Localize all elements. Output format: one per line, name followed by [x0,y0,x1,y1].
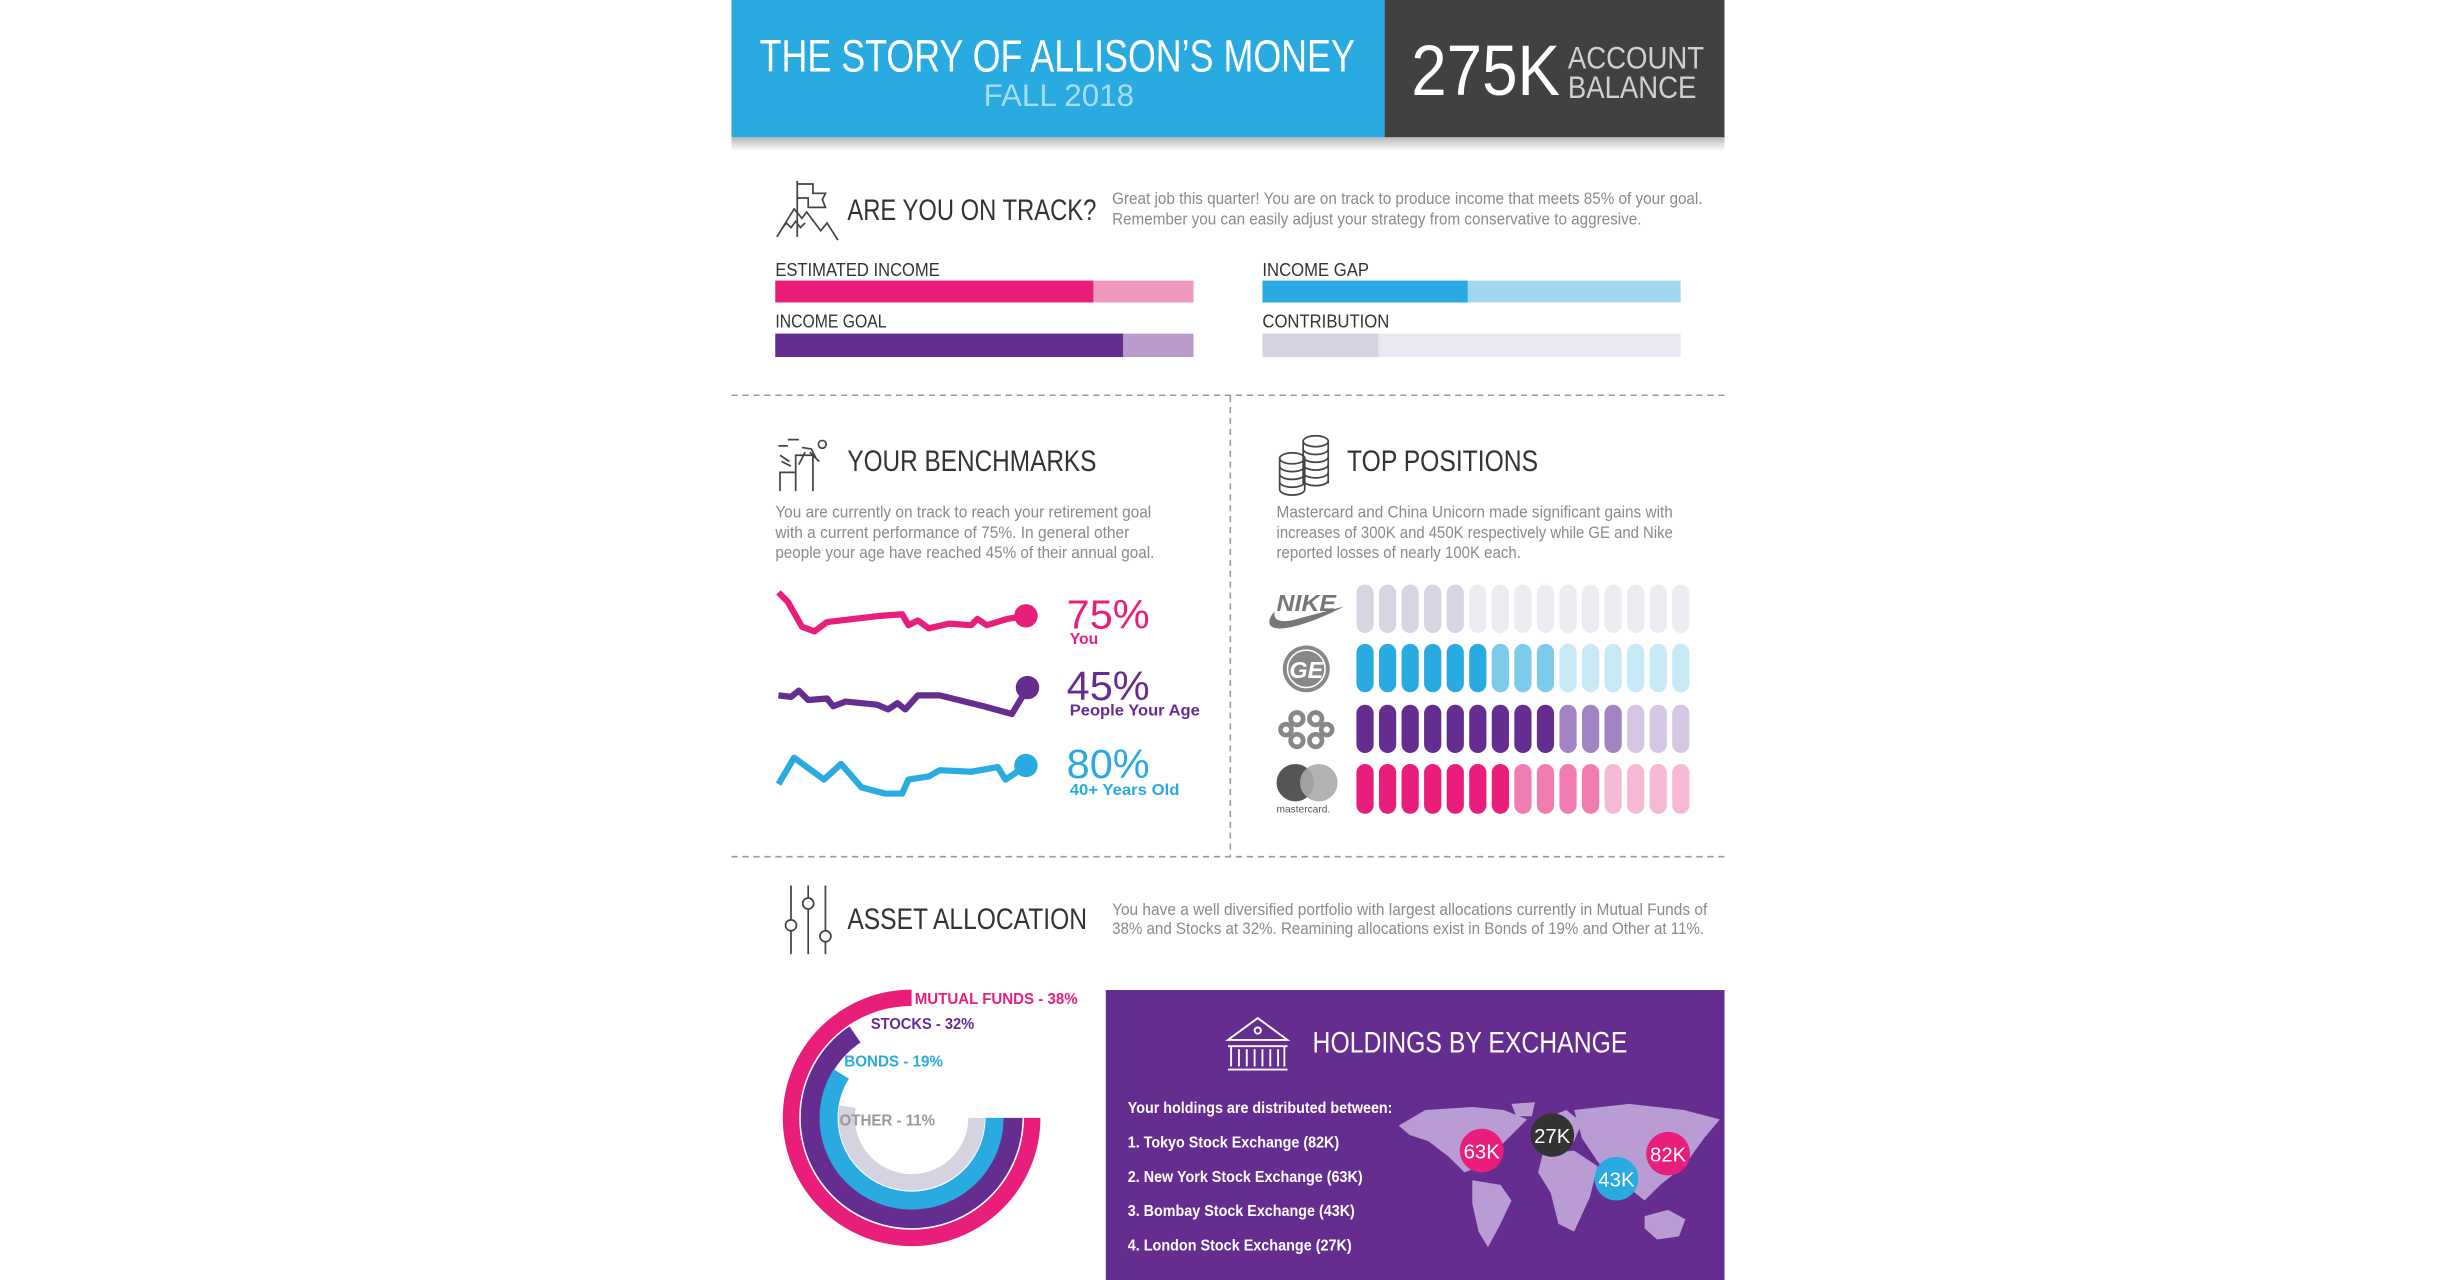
header [731,0,1725,151]
chart: people your age 45%: People Your Age [1070,703,1200,720]
text block: increases of 300K and 450K respectively while GE and Nike [1277,524,1673,542]
chart labels: OTHER - 11% [840,1113,935,1130]
chart: you 75%: You [1070,631,1098,648]
list: Your holdings are distributed between: [1128,1100,1392,1117]
section: are you on track [775,181,1703,357]
chart: you 75%: 75% [1067,591,1150,637]
map markers: 27K [1534,1126,1571,1148]
text block: You have a well diversified portfolio with largest allocations currently in Mutual Funds of [1112,901,1708,919]
panel: benchmarks [774,440,1200,799]
icon: coins [1280,436,1328,495]
text block [774,504,1154,562]
icon: bank [1228,1018,1288,1070]
list [1128,1100,1392,1254]
chart labels: BONDS - 19% [844,1053,943,1070]
heading: ARE YOU ON TRACK? [847,194,1096,227]
heading: HOLDINGS BY EXCHANGE [1313,1026,1627,1059]
text block [1112,190,1703,228]
bar: contribution [1262,310,1681,357]
text block: 38% and Stocks at 32%. Reamining allocations exist in Bonds of 19% and Other at 11%. [1112,920,1704,938]
account balance: BALANCE [1568,70,1696,105]
bar: contribution: CONTRIBUTION [1262,310,1389,331]
chart labels [840,991,1078,1130]
chart: 40+ years old 80%: 40+ Years Old [1070,782,1179,799]
icon: china unicom logo [1280,712,1332,747]
map markers: 63K [1464,1141,1500,1163]
chart: people your age 45% [778,663,1200,720]
account balance [1411,31,1704,111]
text block [1277,504,1673,562]
heading: YOUR BENCHMARKS [847,445,1096,478]
section: asset allocation [786,886,1708,1238]
chart: donut arcs [791,998,1032,1238]
text block: people your age have reached 45% of their annual goal. [775,544,1154,562]
panel: top positions [1269,436,1689,815]
icon: runner stairs [778,440,826,491]
panel: holdings by exchange [1106,990,1725,1280]
icon: mastercard logo [1277,764,1338,815]
list: 1. Tokyo Stock Exchange (82K) [1128,1135,1339,1151]
text block: with a current performance of 75%. In general other [774,524,1130,542]
world map [1399,1102,1720,1247]
text block: Remember you can easily adjust your strategy from conservative to aggresive. [1112,211,1641,228]
text block: Great job this quarter! You are on track to produce income that meets 85% of your goal. [1112,190,1703,208]
icon: mastercard logo: mastercard. [1277,804,1330,815]
icon: sliders [786,886,831,954]
text block: reported losses of nearly 100K each. [1277,544,1521,562]
text block: Mastercard and China Unicorn made significant gains with [1277,504,1673,522]
account balance: 275K [1411,31,1560,111]
list: 3. Bombay Stock Exchange (43K) [1128,1203,1355,1220]
text block: You are currently on track to reach your retirement goal [775,504,1151,522]
chart labels: STOCKS - 32% [871,1016,974,1033]
icon: nike logo [1269,590,1344,628]
chart: you 75% [778,591,1150,648]
map markers: 43K [1598,1169,1635,1191]
chart: 40+ years old 80% [778,741,1179,799]
bar: income gap [1262,259,1681,302]
icon: nike logo: NIKE [1277,590,1338,616]
text block [1112,901,1708,938]
heading: ASSET ALLOCATION [847,903,1087,936]
bar: income goal: INCOME GOAL [775,310,887,331]
heading: TOP POSITIONS [1347,445,1538,478]
bar: estimated income: ESTIMATED INCOME [775,259,940,280]
bar: income goal [775,310,1194,357]
title: THE STORY OF ALLISON’S MONEY [760,31,1355,82]
account balance: ACCOUNT [1568,41,1704,76]
chart labels: MUTUAL FUNDS - 38% [915,991,1078,1008]
bar: income gap: INCOME GAP [1262,259,1369,280]
subtitle: FALL 2018 [984,78,1134,113]
bar: estimated income [775,259,1194,302]
chart: 40+ years old 80%: 80% [1067,741,1150,787]
map markers: 82K [1650,1145,1687,1166]
list: 2. New York Stock Exchange (63K) [1128,1169,1363,1186]
list: 4. London Stock Exchange (27K) [1128,1237,1352,1254]
chart: people your age 45%: 45% [1067,663,1150,709]
map markers [1460,1113,1690,1200]
chart: pill rows [1356,585,1689,814]
icon: flag mountain [777,181,838,240]
icon: ge logo [1283,645,1330,692]
icon: ge logo: GE [1289,657,1325,683]
